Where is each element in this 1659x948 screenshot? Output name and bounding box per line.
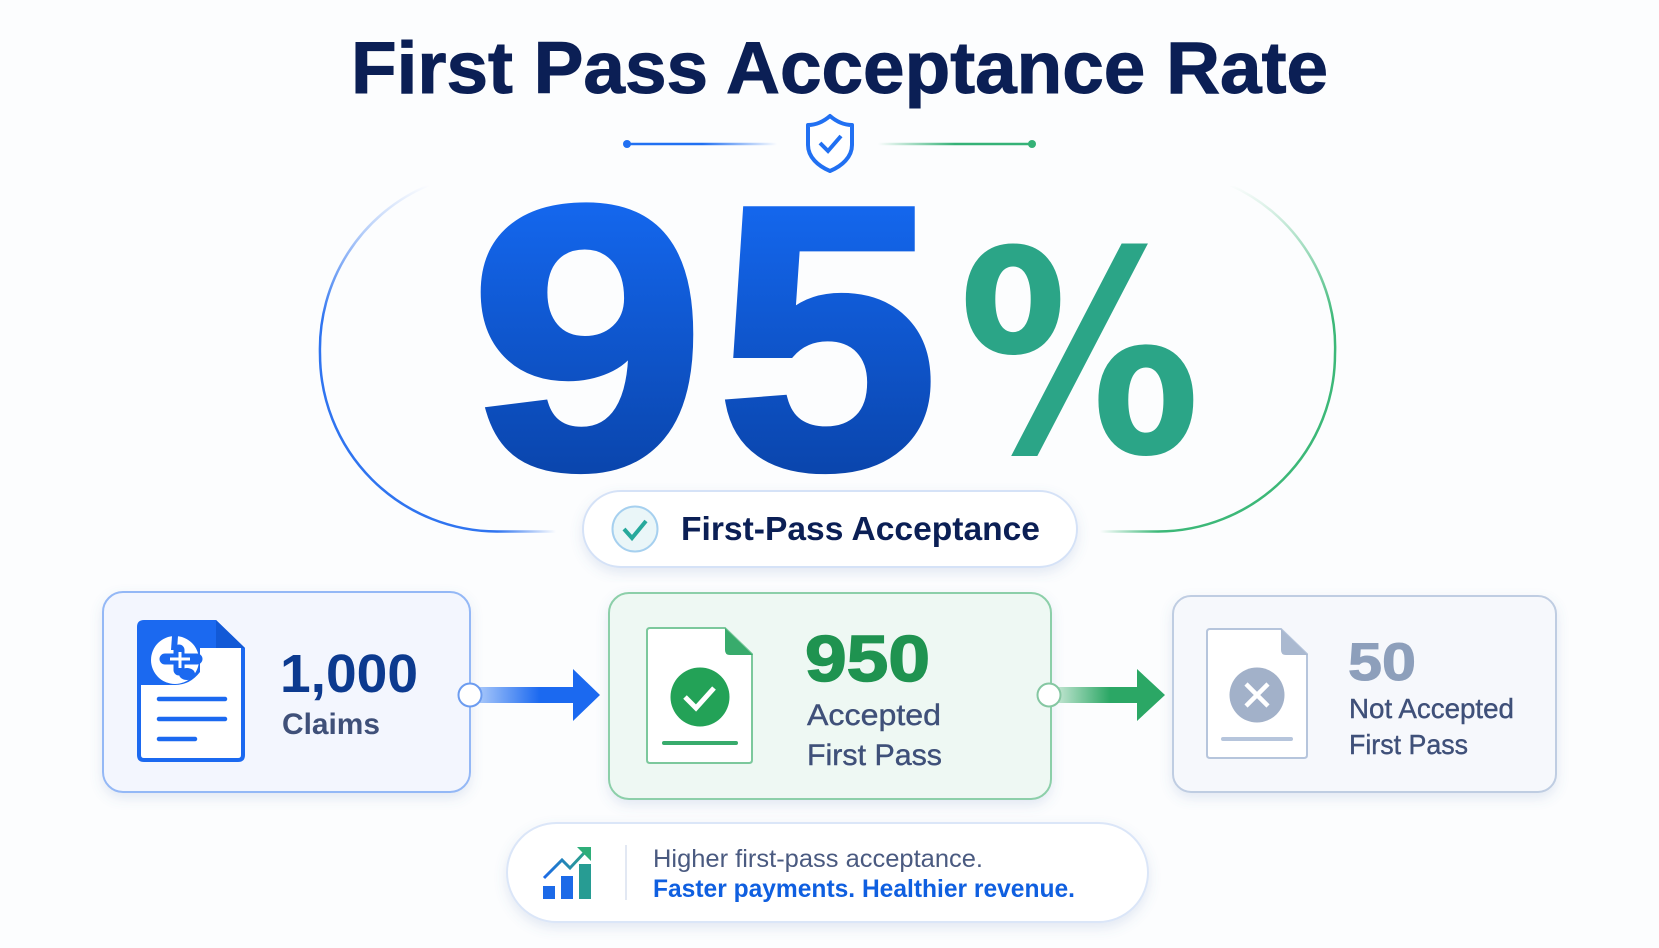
callout: takeaway: Higher first-pass acceptance. — [653, 845, 983, 873]
card: 950 accepted first pass — [609, 593, 1051, 799]
big number 95 percent: 5 — [717, 129, 938, 547]
icon: blue medical claim document — [137, 620, 245, 762]
arrow: accepted to not accepted — [1038, 669, 1165, 721]
icon: accepted document — [647, 628, 753, 763]
card: 50 not accepted first pass — [1173, 596, 1556, 792]
card: 1,000 claims — [103, 592, 470, 792]
card: 950 accepted first pass: Accepted — [807, 699, 941, 732]
card: 950 accepted first pass: 950 — [805, 622, 930, 695]
icon: shield with check — [808, 116, 852, 171]
card: 950 accepted first pass: First Pass — [807, 739, 942, 772]
title: First Pass Acceptance Rate — [351, 28, 1328, 109]
callout: takeaway — [507, 823, 1148, 922]
icon: check circle — [612, 506, 658, 552]
card: 50 not accepted first pass: Not Accepted — [1349, 693, 1514, 724]
card: 50 not accepted first pass: 50 — [1348, 633, 1416, 692]
big number 95 percent — [470, 129, 1201, 547]
card: 50 not accepted first pass: First Pass — [1349, 729, 1468, 760]
card: 1,000 claims: Claims — [282, 708, 380, 741]
decorative rounded frame around the rate — [320, 185, 1335, 532]
icon: rejected document — [1207, 629, 1308, 758]
title divider with shield icon — [623, 116, 1036, 171]
arrow: claims to accepted — [458, 669, 600, 721]
big number 95 percent: 9 — [470, 129, 705, 547]
big number 95 percent: % — [958, 192, 1201, 519]
card: 1,000 claims: 1,000 — [280, 644, 418, 704]
icon: growth bar chart — [543, 847, 591, 899]
badge: First-Pass Acceptance — [583, 491, 1077, 567]
badge: First-Pass Acceptance: First-Pass Acceptance — [681, 510, 1040, 547]
callout: takeaway: Faster payments. Healthier revenue. — [653, 875, 1075, 903]
